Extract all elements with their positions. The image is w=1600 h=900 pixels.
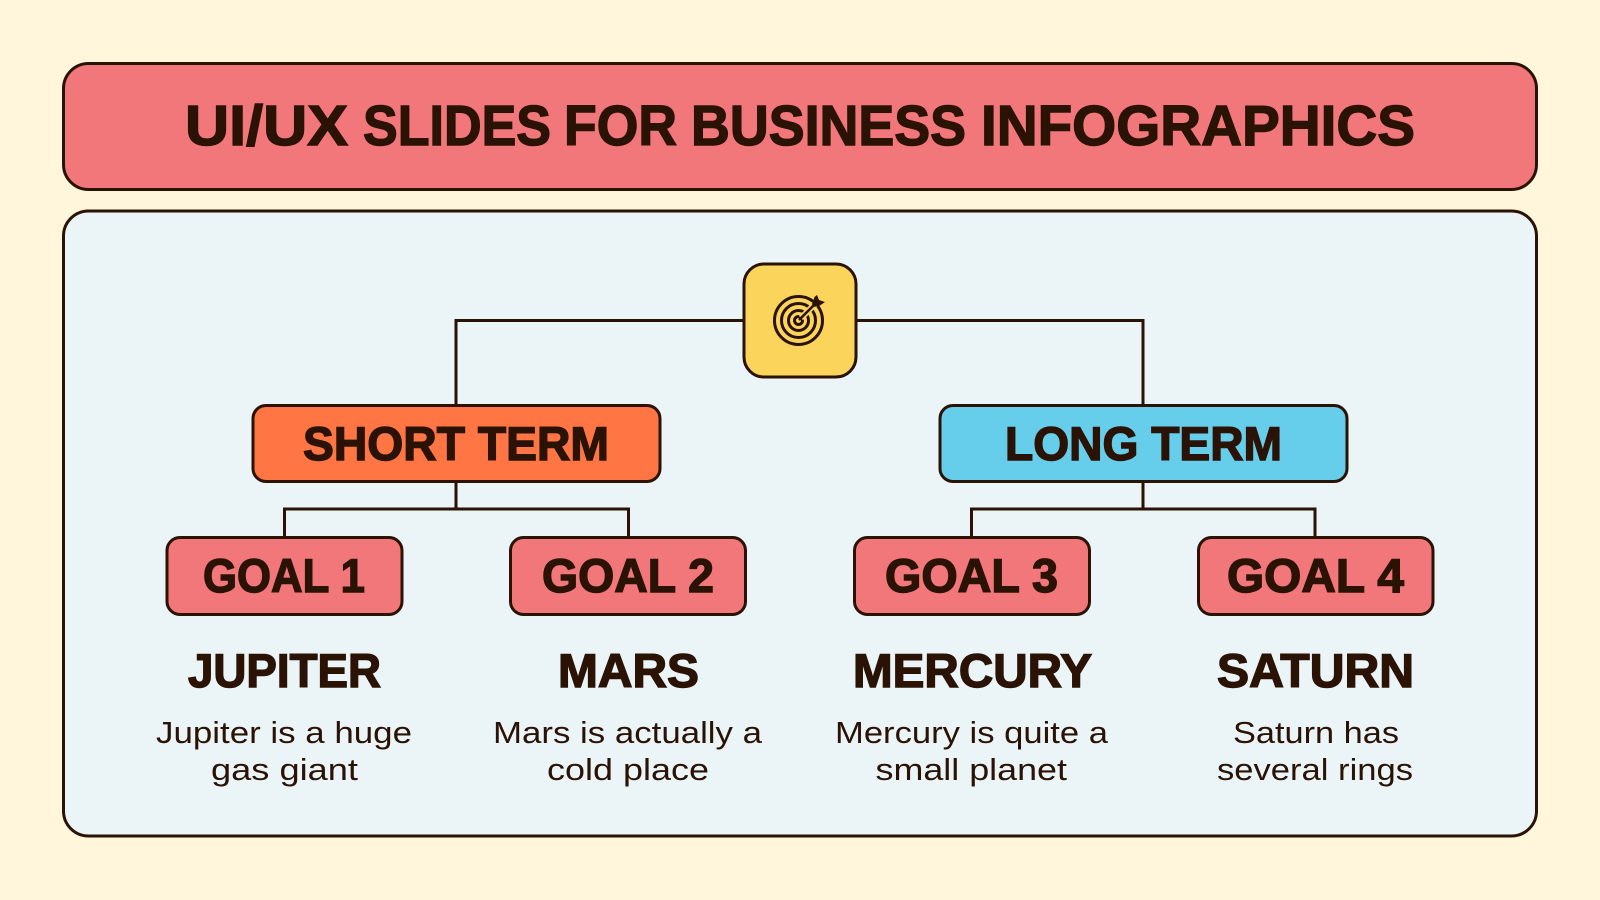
text block: Mercury: small planet xyxy=(876,752,1067,787)
connector: short term to goals xyxy=(284,482,628,537)
connector: long term to goals xyxy=(972,482,1315,537)
goal 3 box: GOAL 3 xyxy=(885,549,1058,602)
text block: Mercury: Mercury is quite a xyxy=(835,715,1109,750)
goal 1 box xyxy=(167,538,402,614)
goal 4 box xyxy=(1198,538,1433,614)
text block: Mars xyxy=(493,644,763,787)
text block: Jupiter: gas giant xyxy=(211,752,358,787)
text block: Jupiter: Jupiter is a huge xyxy=(156,715,412,750)
title xyxy=(185,94,1415,158)
title: SLIDES xyxy=(363,94,551,158)
text block: Mercury: MERCURY xyxy=(853,644,1092,697)
title banner xyxy=(64,64,1536,190)
goal 2 box xyxy=(510,538,746,614)
short term box xyxy=(253,406,660,482)
goal 2 box: GOAL 2 xyxy=(542,549,714,602)
title: BUSINESS xyxy=(691,94,966,158)
title: UI/UX xyxy=(185,94,348,158)
text block: Jupiter: JUPITER xyxy=(188,644,381,697)
long term box: LONG TERM xyxy=(1005,417,1282,470)
text block: Saturn: SATURN xyxy=(1217,644,1414,697)
connector: root to term boxes xyxy=(456,320,1143,405)
text block: Saturn xyxy=(1217,644,1414,787)
text block: Mars: Mars is actually a xyxy=(493,715,763,750)
text block: Jupiter xyxy=(156,644,412,787)
long term box xyxy=(940,406,1347,482)
text block: Saturn: several rings xyxy=(1217,752,1413,787)
icon: target with arrow xyxy=(744,264,856,377)
title: INFOGRAPHICS xyxy=(981,94,1415,158)
text block: Mercury xyxy=(835,644,1109,787)
goal 4 box: GOAL 4 xyxy=(1227,549,1404,602)
panel: goal tree xyxy=(64,211,1536,836)
title: FOR xyxy=(564,94,677,158)
short term box: SHORT TERM xyxy=(303,417,609,470)
text block: Saturn: Saturn has xyxy=(1233,715,1399,750)
text block: Mars: cold place xyxy=(547,752,709,787)
goal 1 box: GOAL 1 xyxy=(203,549,365,602)
text block: Mars: MARS xyxy=(558,644,699,697)
goal 3 box xyxy=(854,538,1090,614)
